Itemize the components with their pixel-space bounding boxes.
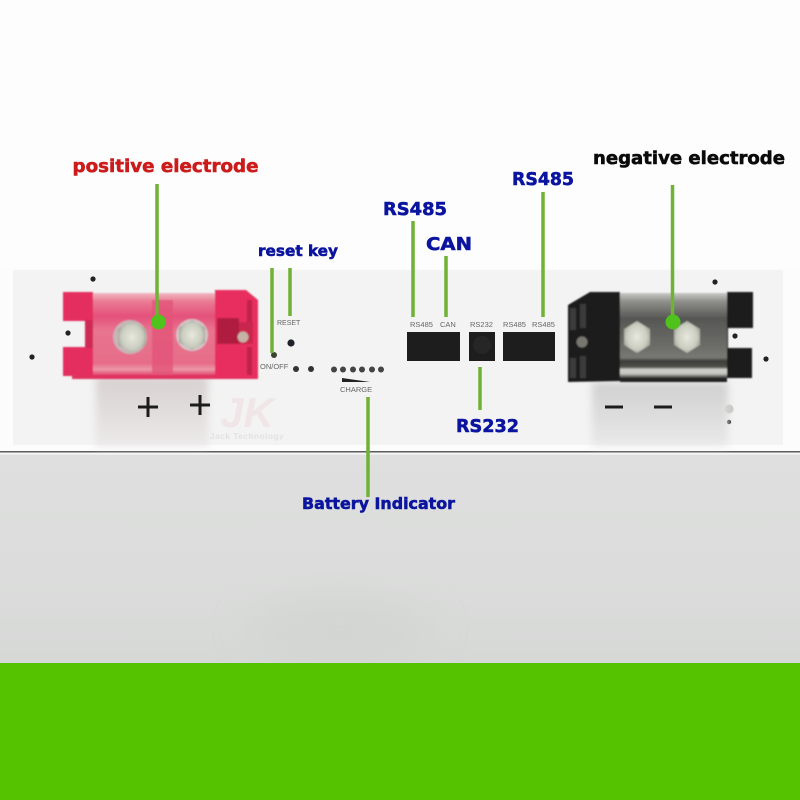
polarity marks: plus — [138, 395, 210, 417]
label: reset key: reset key — [258, 242, 338, 260]
control labels and indicators: ON/OFF — [260, 362, 289, 371]
positive terminal block — [63, 290, 258, 446]
watermark logo: Jack Technology — [210, 431, 284, 441]
control labels and indicators: CHARGE — [340, 385, 372, 394]
panel screw holes — [29, 276, 769, 424]
control labels and indicators: RESET — [277, 320, 301, 327]
terminal marker dots — [151, 314, 680, 330]
communication ports: RS485 — [503, 320, 526, 329]
panel: battery front panel — [0, 268, 800, 455]
leader lines — [157, 184, 672, 497]
communication ports: CAN — [440, 320, 456, 329]
communication ports — [407, 320, 555, 361]
negative terminal block — [568, 292, 753, 446]
communication ports: RS232 — [470, 320, 493, 329]
polarity marks: minus — [605, 406, 672, 408]
watermark logo — [210, 389, 284, 441]
lower battery case — [0, 455, 800, 663]
green base band — [0, 663, 800, 800]
communication ports: RS485 — [532, 320, 555, 329]
label: RS485 left: RS485 — [383, 199, 447, 220]
watermark logo: JK — [220, 389, 277, 436]
communication ports: RS485 — [410, 320, 433, 329]
label: Battery Indicator: Battery Indicator — [302, 494, 455, 513]
control labels and indicators — [260, 320, 384, 394]
label: CAN: CAN — [426, 234, 472, 255]
label: RS485 right: RS485 — [512, 169, 574, 190]
label: negative electrode: negative electrode — [593, 149, 785, 169]
label: RS232: RS232 — [456, 416, 519, 437]
label: positive electrode: positive electrode — [72, 157, 259, 177]
